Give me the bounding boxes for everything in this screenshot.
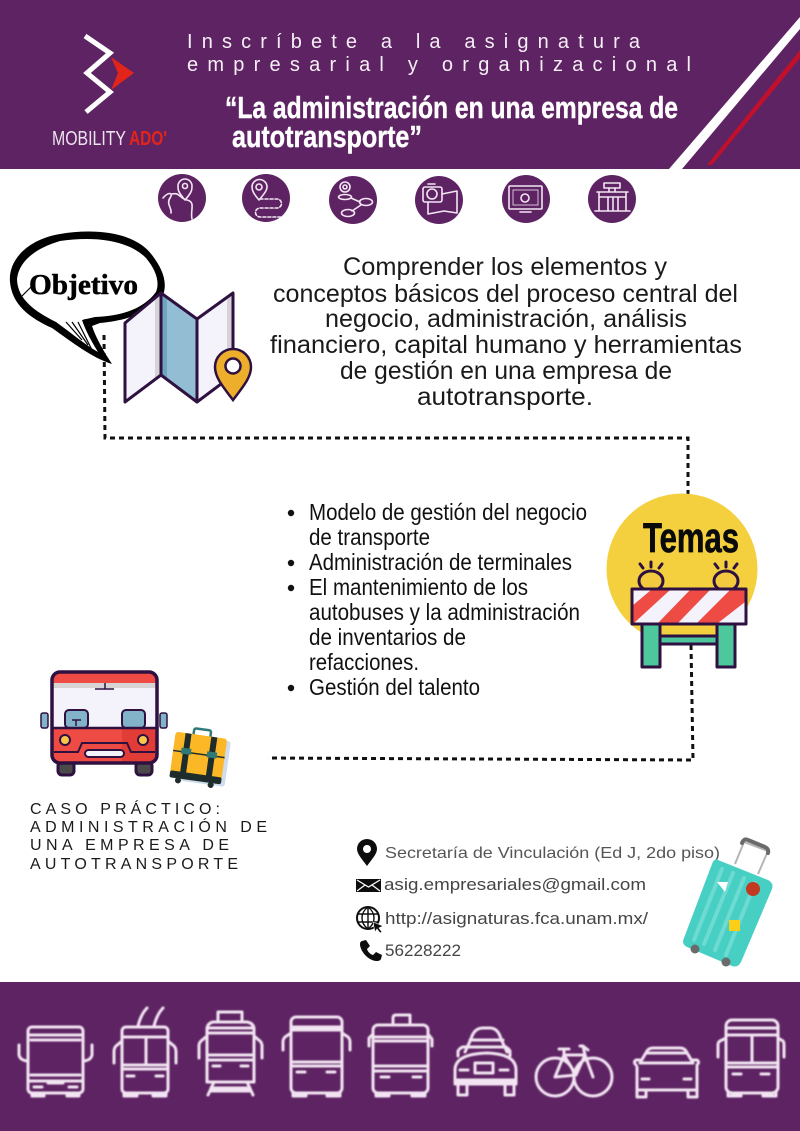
footer band xyxy=(0,982,800,1131)
header title xyxy=(225,90,678,154)
caso practico caption: ADMINISTRACIÓN DE xyxy=(30,817,267,836)
icon: yellow suitcase xyxy=(169,726,232,790)
objective text: conceptos básicos del proceso central del xyxy=(273,280,738,308)
contact block: http://asignaturas.fca.unam.mx/ xyxy=(385,910,648,928)
topics list: Gestión del talento xyxy=(309,674,480,700)
topics list: Modelo de gestión del negocio xyxy=(309,499,587,525)
icon: bus xyxy=(19,1027,92,1096)
caso practico caption: CASO PRÁCTICO: xyxy=(30,799,220,818)
header subtitle: Inscríbete a la asignatura xyxy=(187,31,641,53)
header subtitle: empresarial y organizacional xyxy=(187,54,691,76)
caso practico caption xyxy=(30,799,267,873)
icon: dashed route with pin xyxy=(242,174,290,222)
header title: autotransporte” xyxy=(232,119,422,154)
contact block: Secretaría de Vinculación (Ed J, 2do piso) xyxy=(385,845,720,862)
speech bubble: Objetivo: Objetivo xyxy=(29,270,138,301)
caso practico caption: AUTOTRANSPORTE xyxy=(30,856,238,873)
contact block xyxy=(356,839,720,961)
topics list: refacciones. xyxy=(309,649,419,675)
logo: Mobility ADO: MOBILITY xyxy=(52,128,126,150)
dashed connector: temas to bus xyxy=(268,645,693,760)
objective text: financiero, capital humano y herramientas xyxy=(270,331,742,359)
icon row xyxy=(158,174,636,224)
header band xyxy=(0,0,800,169)
icon: trolleybus xyxy=(114,1008,176,1096)
icon: connected nodes xyxy=(329,176,377,224)
icon: camera and map xyxy=(415,176,463,224)
topics list xyxy=(288,499,587,700)
icon: transit bus xyxy=(369,1015,432,1096)
icon: location pin xyxy=(357,839,377,866)
icon: telephone xyxy=(360,940,382,961)
speech bubble: Objetivo xyxy=(10,232,165,364)
topics list: Administración de terminales xyxy=(309,549,572,575)
objective text: Comprender los elementos y xyxy=(343,253,668,281)
icon: winding road with pin xyxy=(158,174,206,222)
icon: double-door bus xyxy=(718,1020,784,1096)
logo: Mobility ADO xyxy=(52,36,167,150)
contact block: asig.empresariales@gmail.com xyxy=(384,876,646,894)
icon: red bus xyxy=(41,672,167,775)
contact block: 56228222 xyxy=(385,942,461,960)
dashed connector: objetivo to temas xyxy=(104,335,688,494)
header subtitle xyxy=(187,31,691,76)
caso practico caption: UNA EMPRESA DE xyxy=(30,837,229,854)
icon: coach xyxy=(283,1017,350,1096)
icon: computer screen xyxy=(502,175,550,223)
icon: envelope xyxy=(356,879,381,892)
temas badge with barrier: Temas xyxy=(643,514,739,561)
icon: globe with cursor xyxy=(357,907,383,933)
logo: Mobility ADO: ADO' xyxy=(129,128,167,150)
icon: teal suitcase xyxy=(683,839,772,966)
topics list: de transporte xyxy=(309,524,430,550)
topics list: de inventarios de xyxy=(309,624,466,650)
topics list: autobuses y la administración xyxy=(309,599,580,625)
objective text xyxy=(270,253,742,411)
icon: car xyxy=(634,1048,698,1097)
objective text: de gestión en una empresa de xyxy=(340,357,672,385)
icon: taxi with roof rack xyxy=(455,1028,516,1095)
icon: folded map with pin xyxy=(125,293,251,402)
header title: “La administración en una empresa de xyxy=(225,90,678,125)
footer vehicle icons xyxy=(19,1008,784,1097)
icon: bicycle xyxy=(536,1046,612,1096)
objective text: autotransporte. xyxy=(417,383,593,411)
objective text: negocio, administración, análisis xyxy=(325,305,687,333)
icon: store building xyxy=(588,175,636,223)
temas badge with barrier xyxy=(606,494,758,667)
topics list: El mantenimiento de los xyxy=(309,574,528,600)
icon: tram xyxy=(199,1012,262,1095)
